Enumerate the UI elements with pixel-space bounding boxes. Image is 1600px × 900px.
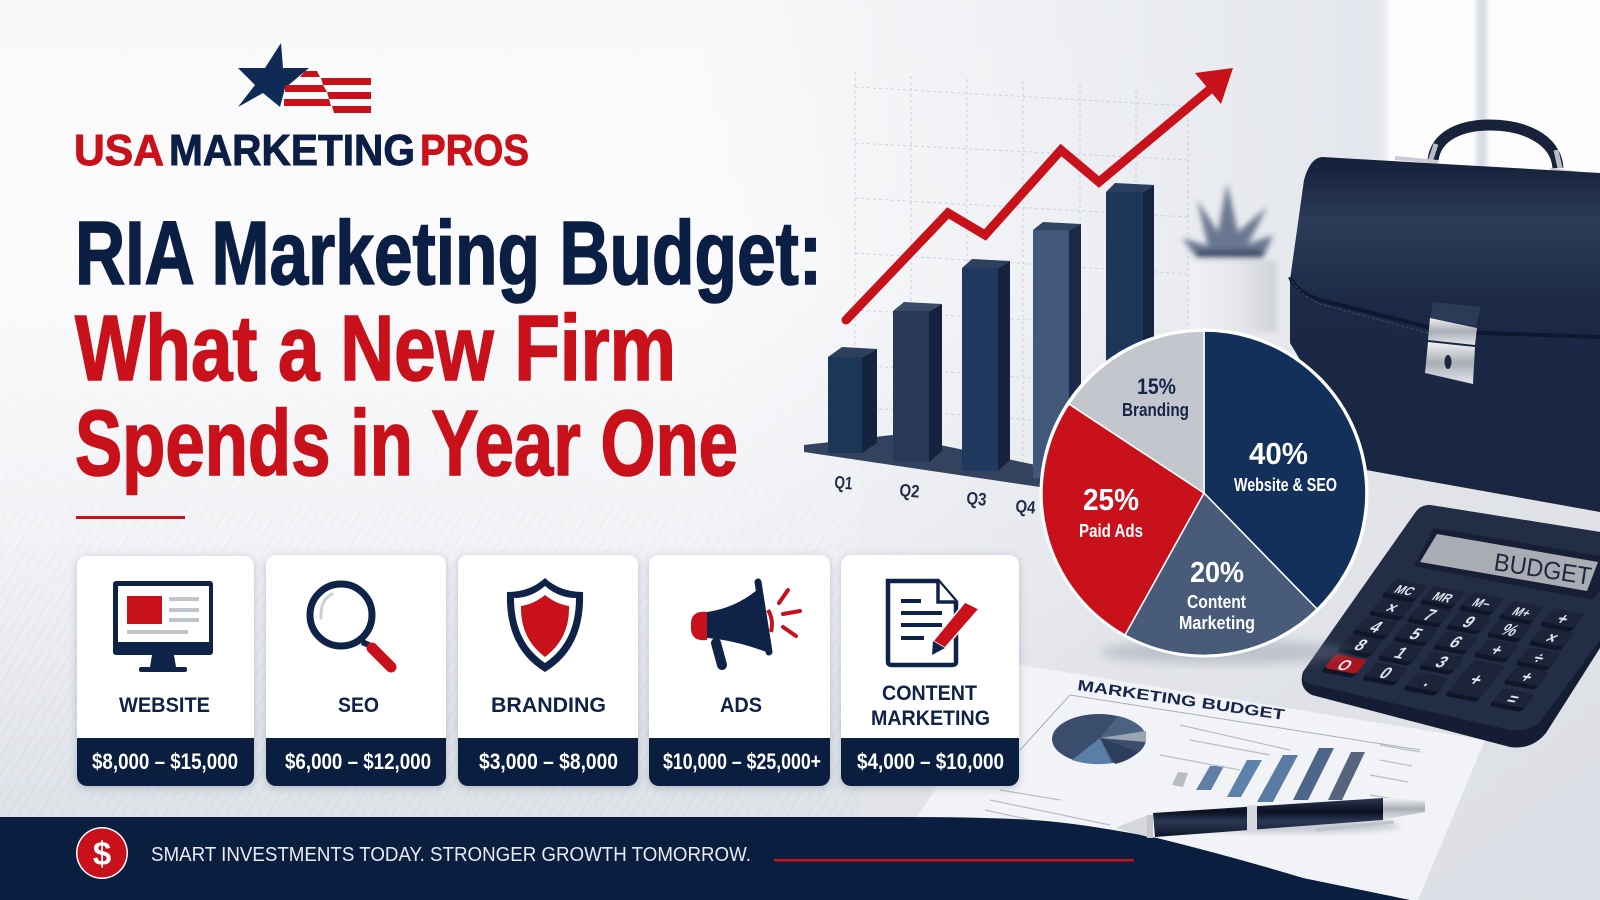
slice: branding 15%: 15%: [1137, 374, 1176, 399]
logo wordmark: USA: [74, 126, 164, 175]
calculator keys: MC: [1391, 582, 1419, 598]
calculator keys: 8: [1350, 635, 1373, 654]
icon: monitor: [113, 581, 213, 672]
slice: paid ads 25%: Paid Ads: [1079, 521, 1143, 541]
calculator keys: 3: [1431, 652, 1454, 671]
coin icon: $: [93, 835, 111, 872]
icon: shield: [507, 578, 583, 672]
calculator keys: ×: [1541, 628, 1564, 647]
calculator keys: 9: [1458, 612, 1481, 631]
slice: branding 15%: Branding: [1122, 400, 1189, 420]
mini pie: [1052, 714, 1146, 764]
card: ads: $10,000 – $25,000+: [663, 749, 821, 774]
briefcase: [1290, 125, 1600, 512]
calculator keys: 0: [1375, 663, 1397, 682]
icon: megaphone: [691, 582, 800, 665]
card: branding: BRANDING: [491, 694, 606, 717]
logo wordmark: PROS: [420, 126, 529, 175]
quarter labels: Q4: [1015, 496, 1036, 518]
card: seo: $6,000 – $12,000: [285, 749, 431, 774]
card: branding: $3,000 – $8,000: [479, 749, 618, 774]
quarter labels: [834, 472, 1036, 518]
calculator keys: M−: [1469, 595, 1495, 611]
quarter labels: Q2: [899, 480, 920, 502]
card: website: WEBSITE: [119, 694, 210, 717]
chart grid: [855, 72, 1188, 470]
logo stripes: [284, 71, 371, 113]
bar Q4: [1033, 222, 1081, 478]
blurred plant: [1182, 183, 1277, 332]
card: seo: [266, 555, 446, 786]
calculator keys: +: [1486, 640, 1509, 659]
slice: content marketing 20%: Marketing: [1179, 613, 1255, 633]
bar Q2: [893, 302, 942, 462]
calculator keys: %: [1496, 620, 1524, 640]
card: content marketing: $4,000 – $10,000: [857, 749, 1004, 774]
logo wordmark: MARKETING: [169, 126, 415, 175]
calculator keys: ÷: [1528, 648, 1551, 667]
title: RIA Marketing Budget:: [75, 204, 822, 304]
calculator keys: 1: [1390, 643, 1413, 662]
calculator keys: MR: [1429, 589, 1457, 605]
card: website: [77, 556, 254, 786]
paper: marketing budget: [900, 665, 1485, 900]
logo star: [238, 43, 309, 107]
calculator keys: =: [1502, 689, 1525, 708]
card: seo: SEO: [338, 694, 379, 717]
paper title: MARKETING BUDGET: [1076, 677, 1286, 724]
calculator keys: O: [1333, 657, 1356, 674]
slice: website and SEO 40%: Website & SEO: [1234, 475, 1337, 495]
bar chart: [804, 183, 1154, 518]
logo wordmark: [74, 126, 529, 175]
calculator keys: 6: [1445, 632, 1468, 651]
icon: magnifier: [310, 584, 391, 667]
card: content marketing: MARKETING: [871, 707, 990, 730]
chart base: [804, 435, 1060, 487]
calculator keys: 7: [1419, 605, 1441, 624]
slice: content marketing 20%: 20%: [1190, 557, 1244, 589]
calculator keys: 5: [1405, 624, 1428, 643]
background window: [1378, 0, 1600, 395]
handle: [1395, 125, 1600, 176]
bar Q5: [1106, 183, 1154, 483]
calculator display: BUDGET: [1492, 548, 1593, 591]
growth arrow: [846, 68, 1233, 320]
calculator keys: [1321, 579, 1586, 712]
card: content marketing: [841, 555, 1019, 786]
slice: branding 15%: [1069, 331, 1204, 493]
logo: [74, 43, 529, 175]
title: What a New Firm: [75, 296, 676, 400]
card: ads: ADS: [720, 694, 762, 717]
title: [75, 204, 822, 495]
slice: paid ads 25%: 25%: [1083, 482, 1139, 517]
calculator display: [1414, 528, 1600, 600]
card: content marketing: CONTENT: [882, 682, 977, 705]
pen: [1115, 798, 1425, 838]
calculator keys: +: [1464, 670, 1489, 689]
slice: website and SEO 40%: 40%: [1249, 436, 1308, 471]
slice: website and SEO 40%: [1204, 331, 1366, 609]
bar Q3: [962, 259, 1010, 471]
calculator keys: .: [1420, 672, 1438, 690]
pie shadow: [1100, 640, 1350, 664]
bar Q1: [828, 347, 877, 453]
calculator keys: ×: [1381, 598, 1404, 617]
footer band: [0, 817, 1410, 900]
slice: paid ads 25%: [1042, 404, 1204, 635]
quarter labels: Q1: [834, 472, 853, 494]
slice: content marketing 20%: [1125, 493, 1317, 655]
slice: content marketing 20%: Content: [1187, 592, 1246, 612]
calculator: [1302, 505, 1600, 747]
mini bars: [1172, 748, 1365, 802]
calculator keys: +: [1552, 609, 1575, 628]
pie chart: [1040, 328, 1368, 658]
case body: [1290, 157, 1600, 512]
coin icon: [76, 827, 128, 879]
footer tagline: SMART INVESTMENTS TODAY. STRONGER GROWTH TOMORROW.: [151, 844, 751, 866]
calculator keys: M+: [1509, 604, 1535, 620]
clasp: [1425, 302, 1481, 384]
card: branding: [458, 555, 638, 786]
calculator keys: 4: [1365, 617, 1388, 636]
icon: document and pencil: [888, 581, 979, 665]
card: website: $8,000 – $15,000: [92, 749, 238, 774]
calculator keys: +: [1516, 667, 1539, 686]
card: ads: [649, 555, 830, 786]
quarter labels: Q3: [966, 488, 987, 510]
flap edge: [1290, 277, 1600, 337]
title: Spends in Year One: [75, 391, 738, 495]
